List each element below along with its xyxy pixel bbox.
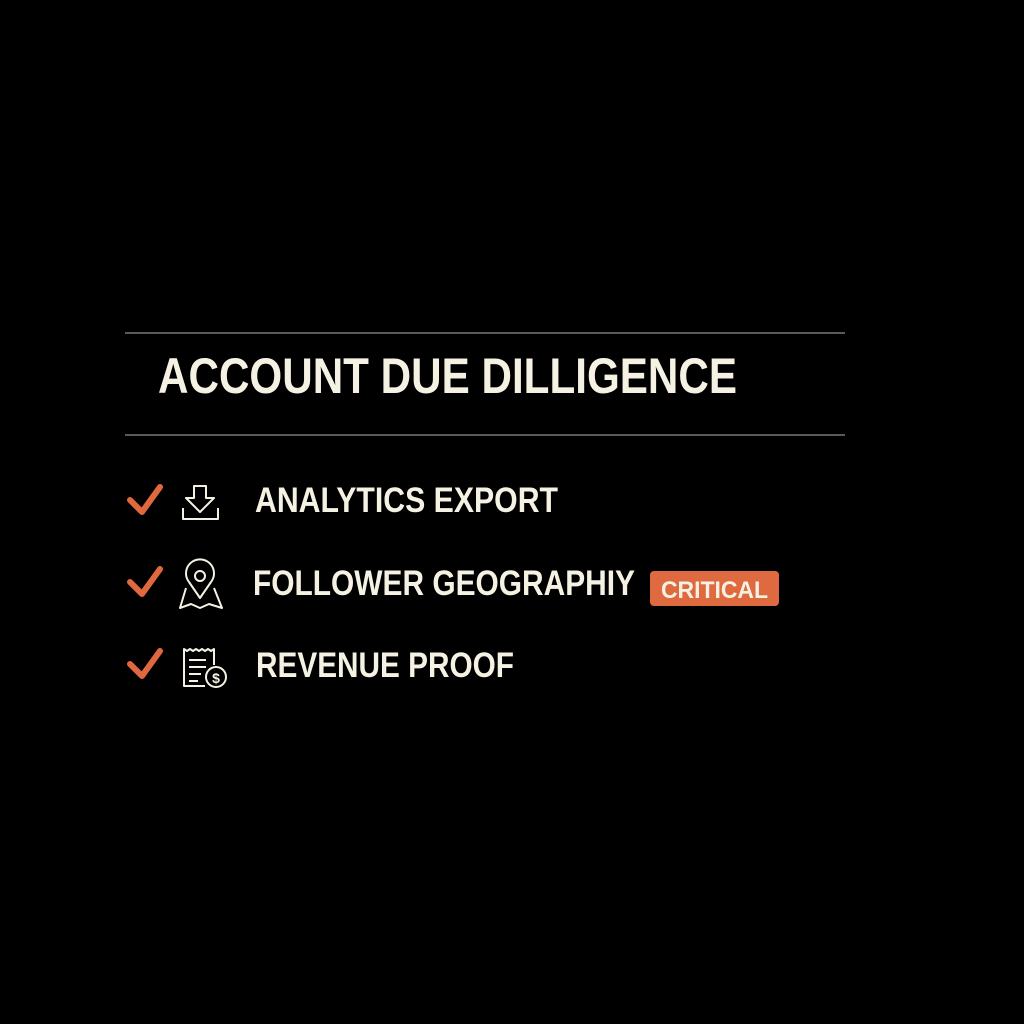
label: revenue proof: REVENUE PROOF	[256, 646, 514, 685]
icon: receipt	[184, 649, 226, 687]
title: ACCOUNT DUE DILLIGENCE	[158, 348, 737, 404]
icon: receipt: $	[212, 670, 220, 686]
icon: download	[183, 486, 218, 519]
item: analytics export	[130, 481, 558, 520]
label: analytics export: ANALYTICS EXPORT	[255, 481, 558, 520]
badge: critical: CRITICAL	[661, 577, 768, 604]
item: revenue proof	[130, 646, 514, 687]
badge: critical	[650, 571, 779, 606]
icon: check 2	[130, 569, 160, 594]
icon: check 3	[130, 651, 160, 676]
icon: map pin	[180, 559, 222, 608]
label: follower geography: FOLLOWER GEOGRAPHIY	[253, 564, 635, 603]
item: follower geography	[130, 559, 779, 608]
icon: check 1	[130, 487, 160, 512]
